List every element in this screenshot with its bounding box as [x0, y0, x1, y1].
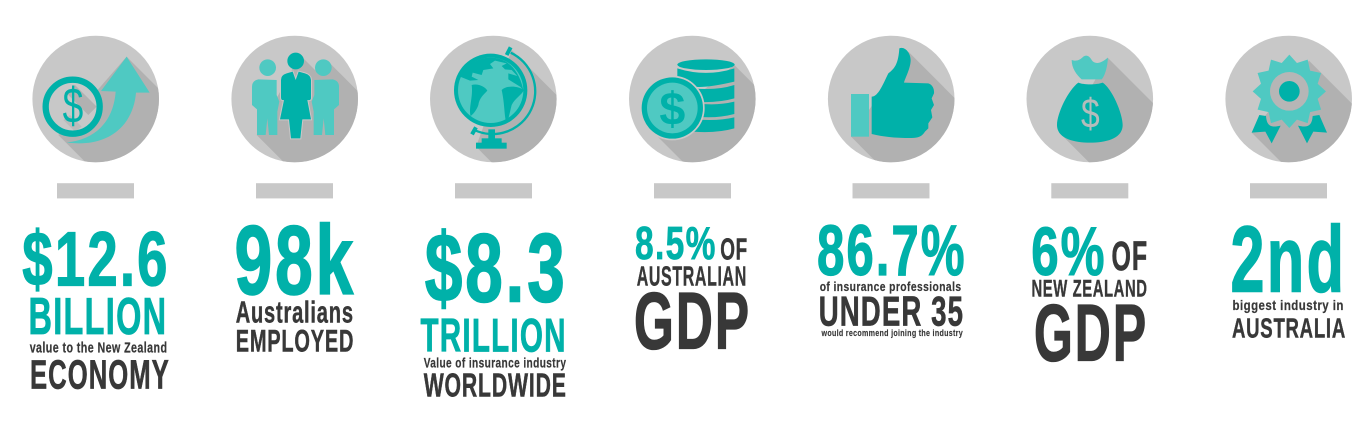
footnote: would recommend joining the industry [821, 328, 963, 339]
connector word: OF [720, 232, 748, 266]
icon: coin and rising arrow: $ [63, 77, 83, 133]
divider bar [852, 183, 930, 198]
icon: thumbs up [828, 36, 954, 162]
label: ECONOMY [30, 351, 170, 397]
icon: award rosette [1225, 36, 1352, 162]
divider bar [654, 183, 731, 198]
divider bar [57, 183, 134, 198]
description: Value of insurance industry [424, 354, 566, 370]
icon: coin and rising arrow [32, 36, 159, 162]
description: value to the New Zealand [30, 339, 167, 356]
unit: TRILLION [420, 310, 567, 363]
icon: coin and stack: $ [659, 82, 685, 134]
label: EMPLOYED [236, 323, 354, 359]
label: WORLDWIDE [424, 367, 567, 404]
unit: BILLION [28, 288, 167, 346]
headline figure: $8.3 [425, 214, 568, 322]
divider bar [1051, 183, 1128, 198]
description: AUSTRALIAN [637, 261, 747, 292]
panel: Australians employed [231, 36, 358, 352]
panel: Australian GDP share [629, 36, 834, 367]
panel: worldwide industry value [420, 36, 566, 397]
description: of insurance professionals [820, 279, 962, 294]
icon: coin and stack [629, 36, 756, 162]
description: Australians [236, 294, 354, 329]
headline figure: $12.6 [22, 217, 170, 303]
divider bar [256, 183, 333, 198]
description: biggest industry in [1232, 297, 1344, 313]
panel: second biggest industry [1225, 36, 1352, 338]
headline figure: 6% [1031, 213, 1106, 290]
divider bar [455, 183, 532, 198]
label: GDP [634, 277, 751, 367]
icon: money bag [1026, 36, 1153, 162]
divider bar [1250, 183, 1327, 198]
description: NEW ZEALAND [1032, 276, 1148, 303]
icon: three people [231, 36, 358, 162]
panel: New Zealand economy value [22, 36, 169, 390]
label: UNDER 35 [819, 288, 964, 334]
panel: New Zealand GDP share [1026, 36, 1153, 362]
headline figure: 8.5% [635, 217, 717, 269]
connector word: OF [1112, 233, 1148, 279]
icon: money bag: $ [1081, 90, 1100, 137]
headline figure: 86.7% [817, 212, 967, 291]
label: GDP [1034, 288, 1148, 378]
headline figure: 98k [234, 205, 356, 315]
icon: globe [430, 36, 557, 162]
panel: under 35 recommendation [818, 36, 964, 338]
